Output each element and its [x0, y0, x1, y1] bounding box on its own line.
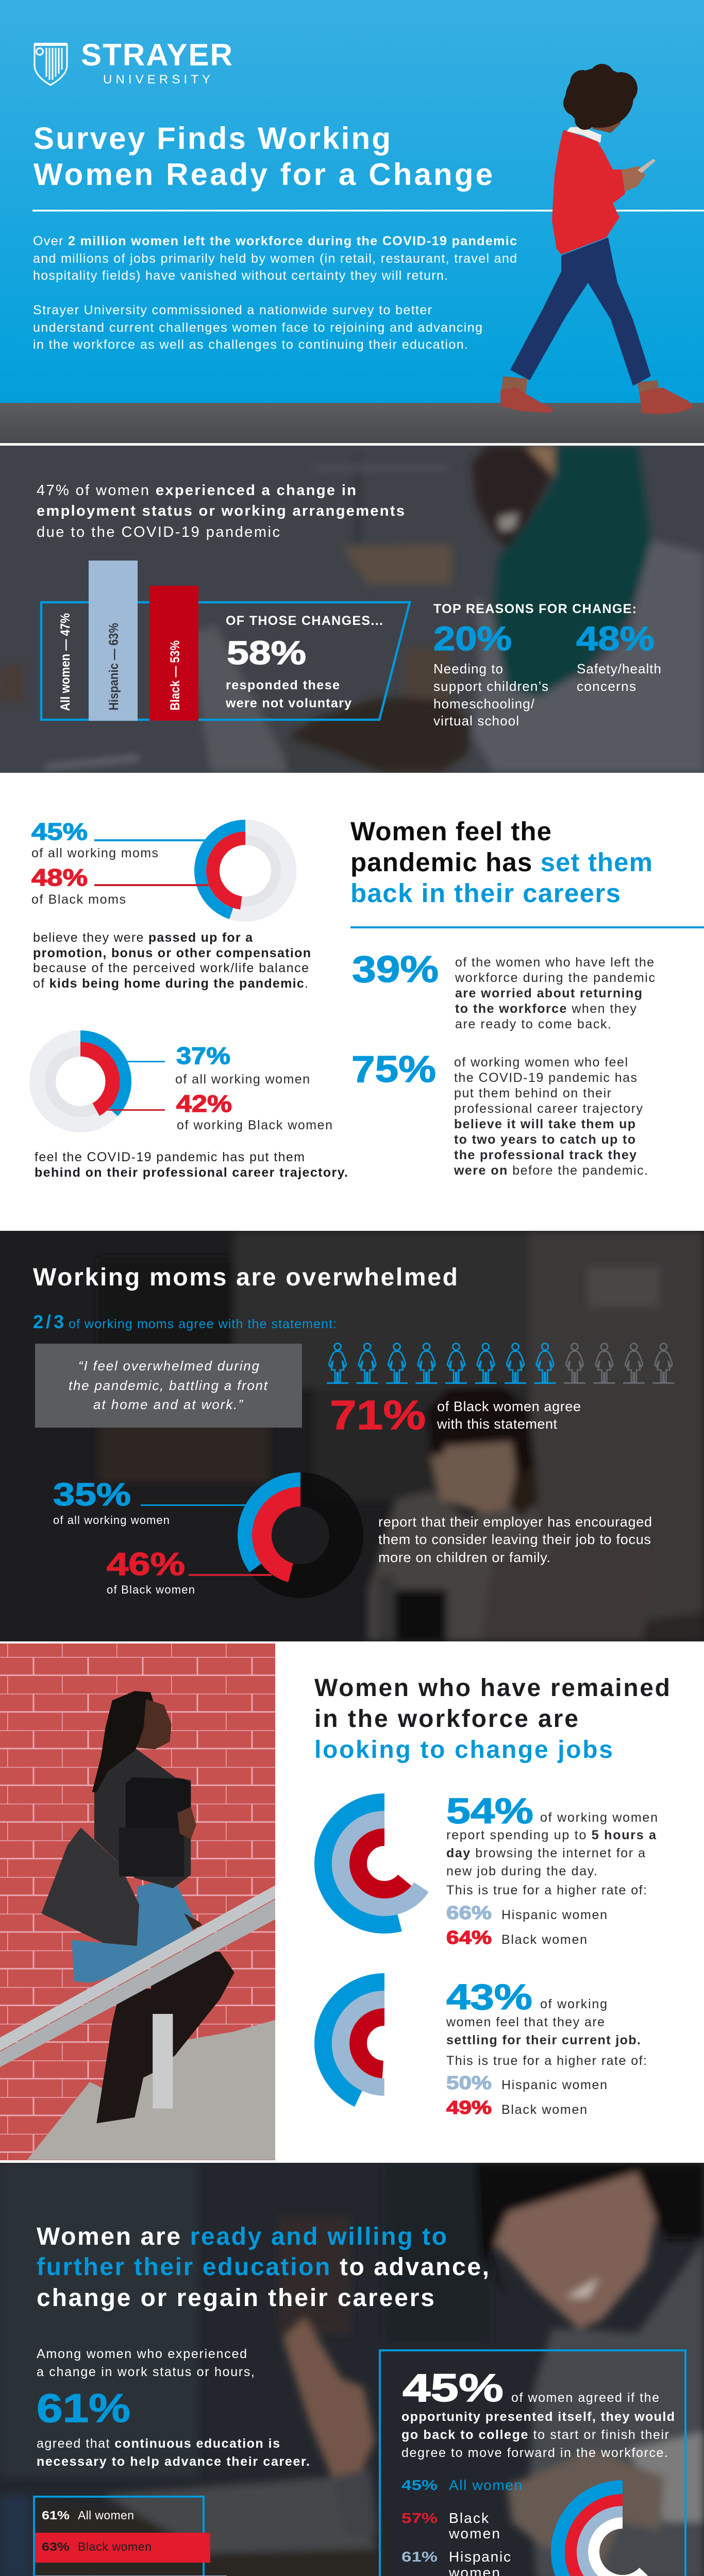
callout box: 45 percent go back to college — [380, 2350, 688, 2576]
stat: 75 percent: believe it will take them up — [454, 1117, 635, 1131]
title: Survey Finds Working — [33, 121, 391, 156]
heading: change or regain their careers — [37, 2284, 434, 2312]
bar chart: continuous education by group: 61% — [42, 2509, 70, 2522]
text block: behind on trajectory — [35, 1150, 348, 1180]
stat: 71 percent Black women: 71% — [330, 1392, 426, 1438]
text block: 47 percent: 47% of women experienced a change in — [37, 482, 356, 499]
stat: 61 percent continuous education: necessary to help advance their career. — [37, 2454, 310, 2469]
bar chart: continuous education by group — [34, 2497, 227, 2576]
stat: 45 and 48 percent moms: of Black moms — [31, 892, 126, 907]
panel: hero — [0, 0, 704, 443]
bar chart: continuous education by group: All women — [78, 2509, 134, 2522]
text block: passed up: because of the perceived work/life balance — [33, 961, 309, 975]
legend: group percentages — [401, 2477, 531, 2576]
background photo: woman at laptop, head in hand — [0, 1231, 704, 1641]
logo: Strayer University — [35, 38, 232, 87]
text block: intro: in the workforce as well as challenges to continuing their education. — [33, 337, 468, 352]
text block: employer encouraged — [378, 1514, 652, 1565]
stat: 37 and 42 percent women: of working Black women — [177, 1118, 332, 1132]
top reasons for change: homeschooling/ — [433, 696, 535, 711]
stat: 37 and 42 percent women: 37% — [176, 1042, 230, 1069]
heading — [350, 817, 652, 908]
stat: 54 percent — [446, 1791, 658, 1948]
heading: in the workforce are — [314, 1705, 578, 1733]
text block: passed up: believe they were passed up for a — [33, 930, 253, 945]
panel: set back in careers — [0, 773, 704, 1231]
radial chart: go back to college — [558, 2487, 688, 2576]
heading — [37, 2223, 489, 2312]
quote box: “I feel overwhelmed during — [78, 1358, 260, 1374]
stat: 71 percent Black women: of Black women agree — [437, 1399, 581, 1414]
panel: employment change — [0, 446, 704, 773]
stat: 43 percent: women feel that they are — [446, 2015, 605, 2029]
legend: group percentages: Black — [449, 2510, 489, 2526]
donut chart: passed up, moms — [200, 825, 291, 916]
radial chart: browsing for jobs — [323, 1802, 446, 1925]
top reasons for change — [433, 602, 661, 728]
stat: 35 and 46 percent: of Black women — [107, 1583, 195, 1596]
text block: intro: Over 2 million women left the workforce during the COVID-19 pandemic — [33, 234, 517, 248]
stat: 39 percent: to the workforce when they — [455, 1002, 637, 1016]
stat: 71 percent Black women: with this statement — [437, 1416, 557, 1432]
callout box: 45 percent go back to college: degree to move forward in the workforce. — [401, 2446, 668, 2460]
bar chart: continuous education by group: Black women — [78, 2540, 152, 2553]
stat: 45 and 48 percent moms: 48% — [31, 864, 88, 891]
radial chart: settling for current job — [323, 1982, 446, 2105]
stat: 75 percent: of working women who feel — [454, 1055, 628, 1070]
stat: 54 percent: day browsing the internet for a — [446, 1846, 645, 1860]
stat: 35 and 46 percent: of all working women — [53, 1514, 170, 1527]
donut chart: encouraged to leave — [245, 1480, 356, 1590]
text block: intro: and millions of jobs primarily held by women (in retail, restaurant, travel and — [33, 251, 517, 266]
background photo: woman in hijab at laptop — [0, 446, 704, 773]
stat: 45 and 48 percent moms: 45% — [31, 818, 88, 845]
callout box: 45 percent go back to college: of women agreed if the — [511, 2391, 659, 2405]
legend: group percentages: 45% — [401, 2477, 438, 2493]
stat: 43 percent: of working — [540, 1997, 607, 2011]
callout: 58 percent not voluntary — [225, 614, 383, 710]
bar chart: change by group: Hispanic — 63% — [107, 623, 121, 710]
stat: 43 percent: 49% — [446, 2097, 492, 2118]
text block: passed up: promotion, bonus or other compensation — [33, 946, 311, 960]
stat: 45 and 48 percent moms — [31, 818, 209, 907]
quote box: the pandemic, battling a front — [69, 1378, 269, 1393]
stat: 39 percent: are ready to come back. — [455, 1017, 611, 1031]
callout box: 45 percent go back to college: go back to college to start or finish their — [401, 2428, 669, 2442]
text block: employer encouraged: more on children or family. — [378, 1550, 550, 1565]
icon row: figures, 8 of 12 highlighted — [327, 1344, 674, 1383]
subheading: 2/3 of working moms: of working moms agree with the statement: — [69, 1317, 337, 1331]
top reasons for change: TOP REASONS FOR CHANGE: — [433, 602, 636, 616]
stat: 54 percent: 54% — [446, 1791, 533, 1831]
callout: 58 percent not voluntary: were not voluntary — [225, 696, 351, 710]
top reasons for change: Needing to — [433, 661, 503, 676]
title — [33, 121, 493, 192]
panel: working moms overwhelmed — [0, 1231, 704, 1641]
heading: Women who have remained — [314, 1674, 670, 1702]
stat: 54 percent: 64% — [446, 1927, 492, 1948]
photo: woman climbing stairs by brick wall — [0, 1643, 275, 2160]
text block: passed up: of kids being home during the pandemic. — [33, 976, 308, 991]
callout: 58 percent not voluntary: OF THOSE CHANGES... — [226, 614, 383, 628]
panel: ready to further education — [0, 2163, 704, 2576]
callout box: 45 percent go back to college: 45% — [403, 2366, 504, 2410]
text block: 47 percent: employment status or working arrangements — [37, 503, 405, 519]
text block: employer encouraged: report that their employer has encouraged — [378, 1514, 652, 1530]
stat: 43 percent: settling for their current job. — [446, 2033, 641, 2047]
stat: 39 percent: are worried about returning — [455, 986, 642, 1001]
stat: 35 and 46 percent: 46% — [107, 1547, 185, 1582]
stat: 75 percent: put them behind on their — [454, 1086, 611, 1100]
text block: employer encouraged: them to consider leaving their job to focus — [378, 1532, 651, 1547]
text block: intro: hospitality fields) have vanished without certainty they will return. — [33, 268, 448, 283]
stat: 39 percent — [352, 949, 655, 1031]
background photo: smiling woman with baby at desk — [0, 2163, 704, 2576]
stat: 61 percent continuous education: agreed that continuous education is — [37, 2436, 280, 2451]
text block: intro — [33, 234, 517, 352]
stat: 37 and 42 percent women — [108, 1042, 332, 1132]
stat: 75 percent: to two years to catch up to — [454, 1132, 635, 1147]
top reasons for change: support children’s — [433, 679, 548, 694]
stat: 54 percent: Hispanic women — [501, 1908, 607, 1922]
stat: 43 percent: 43% — [446, 1977, 532, 2017]
bar chart: change by group: All women — 47% — [58, 613, 73, 711]
text block: behind on trajectory: feel the COVID-19 pandemic has put them — [35, 1150, 305, 1164]
heading — [314, 1674, 670, 1764]
legend: group percentages: Hispanic — [449, 2549, 511, 2565]
heading: back in their careers — [350, 878, 621, 908]
legend: group percentages: 61% — [401, 2549, 438, 2565]
stat: 61 percent continuous education: Among women who experienced — [37, 2347, 247, 2361]
panel: looking to change jobs — [0, 1641, 704, 2163]
stat: 54 percent: Black women — [501, 1933, 587, 1947]
stat: 37 and 42 percent women: of all working women — [175, 1072, 310, 1087]
text block: intro: Strayer University commissioned a nationwide survey to better — [33, 303, 432, 317]
stat: 54 percent: This is true for a higher rate of: — [446, 1883, 647, 1897]
text block: passed up — [33, 930, 311, 991]
stat: 43 percent — [446, 1977, 647, 2118]
text block: behind on trajectory: behind on their professional career trajectory. — [35, 1165, 348, 1180]
callout: 58 percent not voluntary: 58% — [227, 634, 306, 671]
stat: 61 percent continuous education: 61% — [37, 2385, 130, 2431]
stat: 75 percent: the COVID-19 pandemic has — [454, 1071, 637, 1085]
stat: 75 percent: the professional track they — [454, 1148, 636, 1162]
photo: woman walking with phone — [500, 64, 694, 414]
top reasons for change: concerns — [577, 679, 636, 694]
stat: 43 percent: Hispanic women — [501, 2078, 607, 2092]
logo: Strayer University: UNIVERSITY — [103, 73, 210, 87]
top reasons for change: 20% — [433, 619, 512, 657]
text block: 47 percent — [37, 482, 405, 540]
bar chart: continuous education by group: 63% — [42, 2540, 70, 2553]
heading: looking to change jobs — [314, 1736, 613, 1764]
top reasons for change: virtual school — [433, 713, 519, 728]
heading: further their education to advance, — [37, 2253, 489, 2281]
stat: 35 and 46 percent — [53, 1477, 272, 1596]
quote box: at home and at work.” — [93, 1397, 243, 1412]
bar chart: change by group — [41, 561, 410, 721]
heading: pandemic has set them — [350, 848, 652, 877]
stat: 43 percent: Black women — [501, 2103, 587, 2117]
text block: 47 percent: due to the COVID-19 pandemic — [37, 524, 280, 540]
heading: Women feel the — [350, 817, 551, 846]
callout box: 45 percent go back to college: opportunity presented itself, they would — [401, 2410, 675, 2424]
stat: 39 percent: workforce during the pandemic — [455, 971, 655, 985]
icon: column shield — [35, 44, 67, 85]
subheading: 2/3 of working moms: 2/3 — [33, 1311, 64, 1332]
stat: 54 percent: of working women — [540, 1810, 658, 1825]
logo: Strayer University: STRAYER — [81, 38, 232, 72]
title: Women Ready for a Change — [33, 157, 493, 192]
heading: Working moms are overwhelmed — [33, 1264, 458, 1291]
stat: 39 percent: 39% — [352, 949, 439, 990]
stat: 37 and 42 percent women: 42% — [176, 1090, 232, 1117]
subheading: 2/3 of working moms — [33, 1311, 337, 1332]
stat: 43 percent: This is true for a higher rate of: — [446, 2054, 647, 2068]
stat: 61 percent continuous education: a change in work status or hours, — [37, 2365, 255, 2379]
hero background: pavement — [0, 403, 704, 443]
top reasons for change: Safety/health — [577, 661, 661, 676]
stat: 43 percent: 50% — [446, 2072, 492, 2093]
stat: 35 and 46 percent: 35% — [53, 1477, 131, 1513]
quote box — [35, 1344, 302, 1428]
stat: 39 percent: of the women who have left the — [455, 955, 654, 970]
bar chart: change by group: Black — 53% — [168, 640, 182, 710]
stat: 54 percent: 66% — [446, 1902, 492, 1923]
stat: 61 percent continuous education — [37, 2347, 310, 2469]
legend: group percentages: women — [448, 2526, 500, 2541]
stat: 75 percent: were on before the pandemic. — [454, 1163, 648, 1178]
stat: 54 percent: new job during the day. — [446, 1864, 597, 1878]
callout: 58 percent not voluntary: responded these — [226, 678, 340, 692]
stat: 75 percent — [351, 1049, 648, 1178]
stat: 71 percent Black women — [330, 1392, 581, 1438]
hero background: blue wall — [0, 0, 704, 403]
top reasons for change: 48% — [576, 619, 655, 657]
stat: 75 percent: 75% — [351, 1049, 436, 1090]
stat: 75 percent: professional career trajectory — [454, 1101, 643, 1116]
heading: Women are ready and willing to — [37, 2223, 447, 2250]
stat: 54 percent: report spending up to 5 hours a — [446, 1828, 657, 1842]
stat: 45 and 48 percent moms: of all working moms — [31, 846, 158, 860]
legend: group percentages: 57% — [401, 2510, 438, 2526]
legend: group percentages: All women — [449, 2477, 522, 2493]
donut chart: behind on trajectory — [35, 1037, 126, 1126]
text block: intro: understand current challenges women face to rejoining and advancing — [33, 320, 482, 335]
